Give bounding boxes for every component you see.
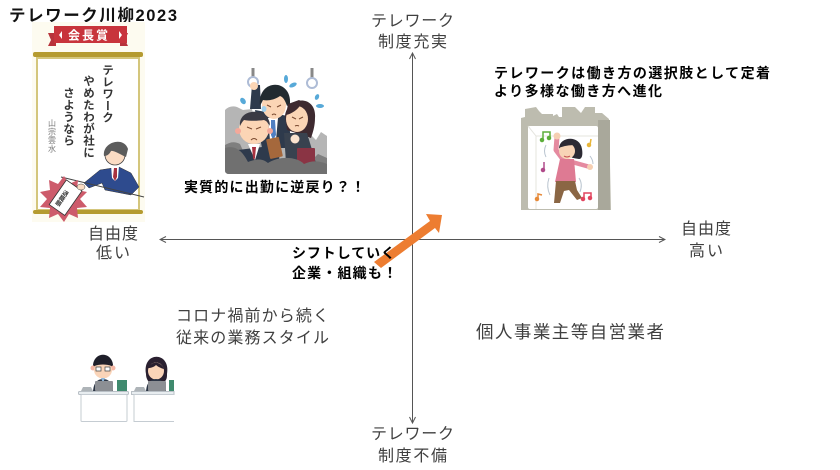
sweat drops <box>239 75 324 108</box>
caption: conventional work style: 従来の業務スタイル <box>176 329 329 347</box>
illustration: man throwing resignation letter: 退職願 <box>52 188 70 208</box>
tall man <box>250 82 292 148</box>
vertical axis: telework system <box>412 53 414 423</box>
foreground crowd <box>225 147 327 174</box>
axis label: freedom low: 低い <box>96 244 130 262</box>
caption: companies shifting: シフトしていく <box>292 245 395 261</box>
caption: self-employed: 個人事業主等自営業者 <box>476 322 664 342</box>
axis label: system lacking <box>371 425 454 465</box>
caption: companies shifting <box>292 245 397 281</box>
caption: telework established: より多様な働き方へ進化 <box>494 83 662 99</box>
scroll frame <box>33 52 143 214</box>
poem text <box>48 64 114 158</box>
poem text: 山宗雲水 <box>48 119 56 153</box>
music notes <box>536 132 592 200</box>
axis label: system full: テレワーク <box>371 12 454 30</box>
background crowd <box>225 106 327 173</box>
poem text: やめたわが社に <box>82 75 95 158</box>
worker woman <box>132 357 174 422</box>
axis label: system lacking: 制度不備 <box>378 447 447 465</box>
axis label: freedom high <box>681 220 731 260</box>
shift arrow <box>374 214 442 268</box>
caption: back to the office: 実質的に出勤に逆戻り？！ <box>184 179 365 195</box>
award ribbon <box>48 26 128 46</box>
axis label: freedom low <box>88 225 138 262</box>
axis label: system lacking: テレワーク <box>371 425 454 443</box>
caption: companies shifting: 企業・組織も！ <box>292 265 397 281</box>
poem text: テレワーク <box>101 64 114 124</box>
hanging straps <box>248 68 317 88</box>
poster: award senryu <box>32 22 145 222</box>
axis label: freedom high: 高い <box>689 242 723 260</box>
illustration: man throwing resignation letter <box>40 142 144 222</box>
caption: conventional work style: コロナ禍前から続く <box>176 307 329 325</box>
horizontal axis: freedom <box>160 238 665 240</box>
axis label: freedom high: 自由度 <box>681 220 731 238</box>
dancing figure <box>544 132 593 203</box>
caption: telework established: テレワークは働き方の選択肢として定着 <box>494 65 770 81</box>
worker with glasses <box>78 355 128 422</box>
award ribbon: 会長賞 <box>68 28 108 42</box>
front man <box>235 112 283 168</box>
caption: conventional work style <box>176 307 329 347</box>
caption: telework established <box>494 65 770 99</box>
axis label: system full <box>371 12 454 51</box>
illustration: happy dancing woman in building <box>521 107 611 210</box>
axis label: freedom low: 自由度 <box>88 225 138 243</box>
woman <box>284 100 316 164</box>
title: テレワーク川柳2023 <box>9 6 177 25</box>
poem text: さようなら <box>62 87 75 146</box>
illustration: crowded commuter train <box>225 68 327 174</box>
illustration: office workers at desks <box>78 355 174 422</box>
axis label: system full: 制度充実 <box>378 33 447 51</box>
